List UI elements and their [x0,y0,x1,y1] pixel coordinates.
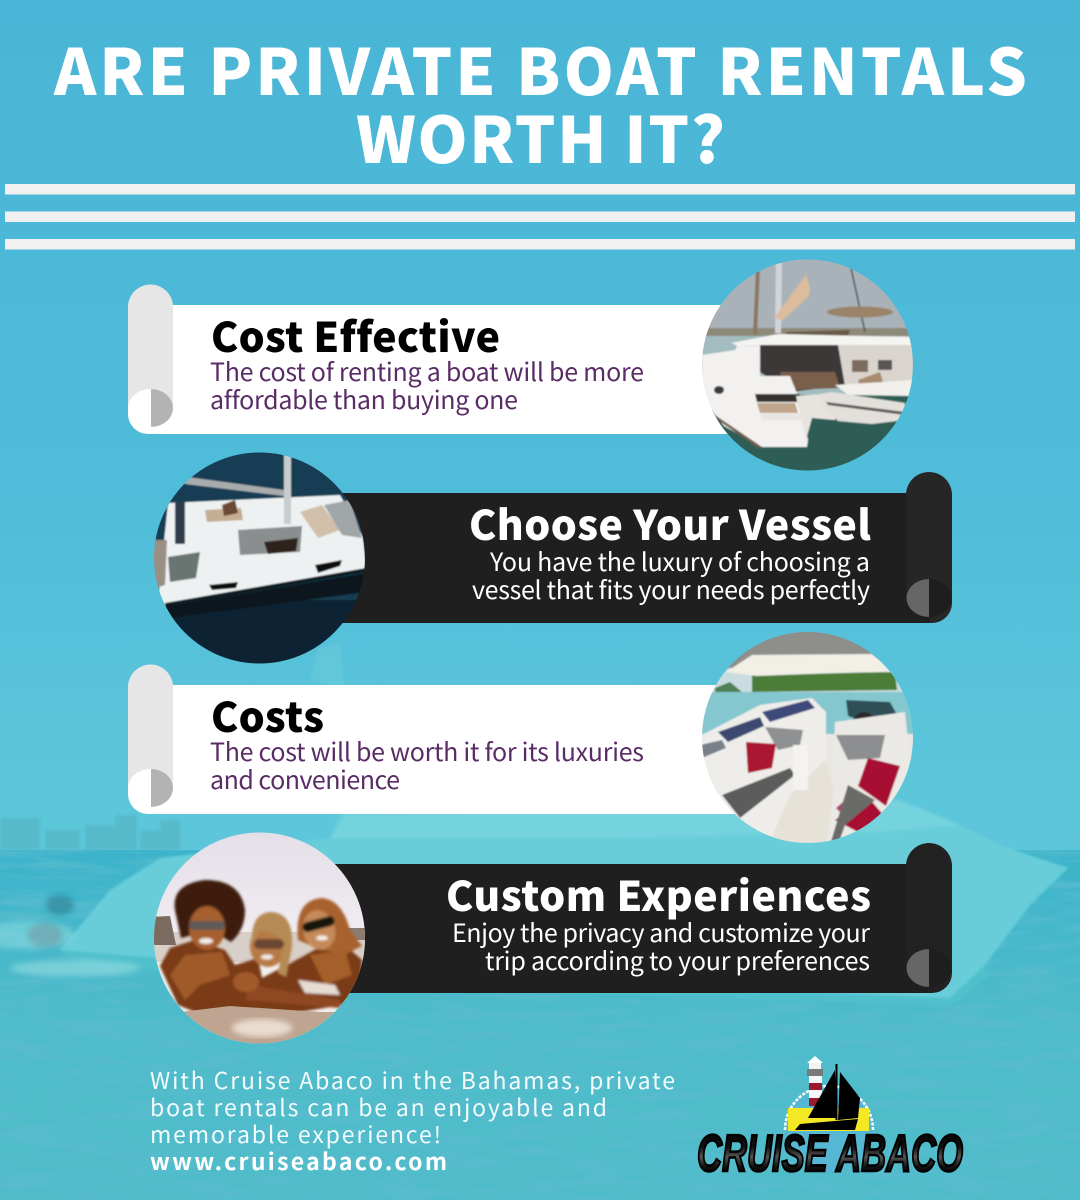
photo: boat deck with red cushions [700,630,916,846]
panel: costs [128,630,916,846]
scroll banner [335,843,952,993]
body text [472,543,870,607]
scroll banner [335,472,952,623]
photo: catamaran stern [700,258,916,475]
logo: Cruise Abaco [697,1056,963,1183]
body text: Enjoy the privacy and customize your [452,914,870,950]
panel: cost effective [128,258,916,475]
body text: trip according to your preferences [485,942,870,978]
title: WORTH IT? [356,90,725,182]
body text: and convenience [210,761,400,797]
closing text: With Cruise Abaco in the Bahamas, private [150,1062,675,1096]
title [53,22,1027,182]
body text: The cost will be worth it for its luxuries [210,733,644,769]
body text [452,914,870,978]
scroll banner [128,284,735,434]
closing text [150,1062,675,1177]
heading: Custom Experiences [446,863,871,923]
title divider lines [5,184,1075,250]
website: www.cruiseabaco.com [150,1143,447,1177]
body text: The cost of renting a boat will be more [210,353,644,389]
closing text: memorable experience! [150,1116,441,1150]
body text: affordable than buying one [210,381,518,417]
body text [210,733,644,797]
panel: choose your vessel [150,450,952,670]
photo: catamaran from above [150,450,370,670]
body text [210,353,644,417]
panel: custom experiences [150,830,952,1048]
heading: Cost Effective [211,304,500,364]
body text: You have the luxury of choosing a [489,543,870,579]
body text: vessel that fits your needs perfectly [472,571,870,607]
photo: three friends sunbathing [150,830,370,1048]
yacht hull [58,642,1068,1006]
heading: Choose Your Vessel [469,492,871,552]
closing text: boat rentals can be an enjoyable and [150,1089,607,1123]
logo emblem: lighthouse and sailboat [785,1056,873,1172]
scroll banner [128,665,735,814]
distant shoreline buildings [0,815,180,850]
wake spray [0,895,140,976]
title: ARE PRIVATE BOAT RENTALS [53,22,1027,114]
heading: Costs [211,684,324,744]
